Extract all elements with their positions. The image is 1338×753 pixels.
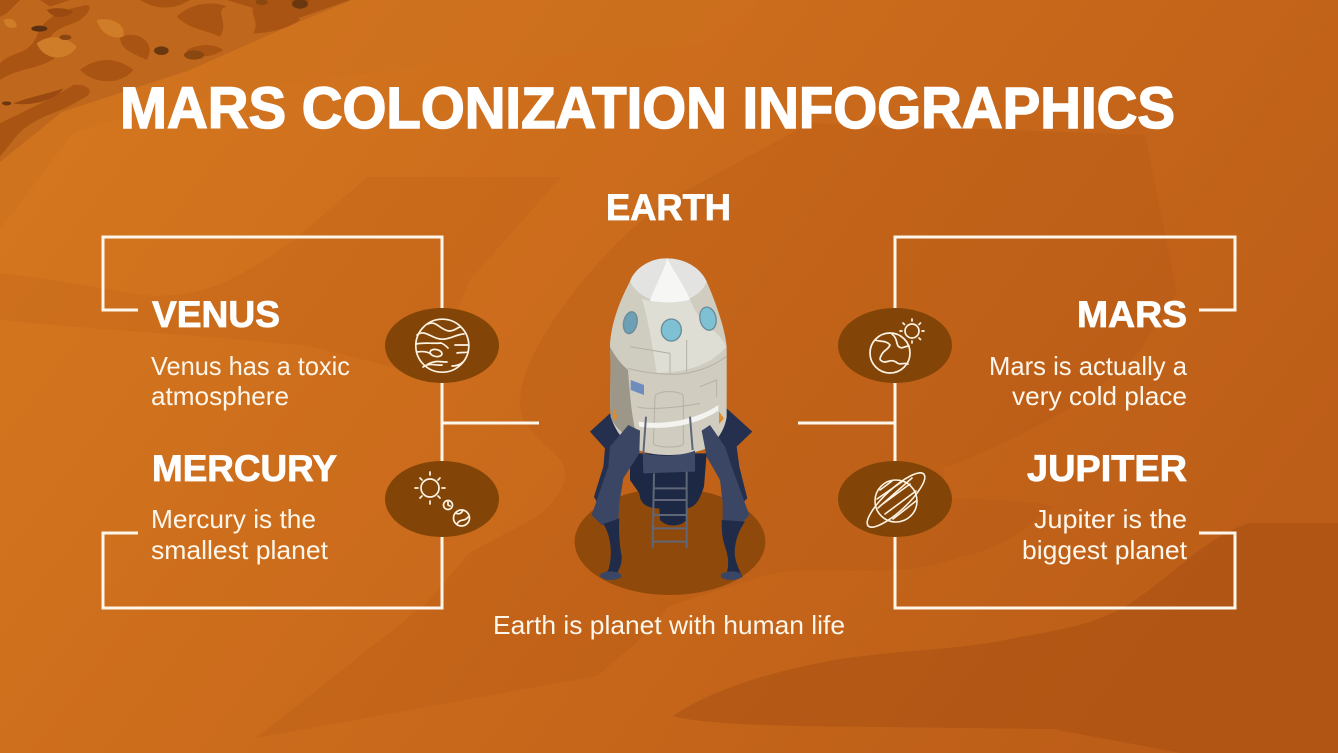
rocket ladder and platform — [643, 417, 695, 548]
rocket ground shadow — [575, 488, 765, 595]
text: mars description: very cold place — [1012, 381, 1187, 411]
text: mars description — [989, 351, 1188, 411]
connector frame: right — [798, 237, 1235, 608]
title: MARS COLONIZATION INFOGRAPHICS — [120, 76, 1175, 141]
rocket rear legs — [590, 408, 752, 505]
text: jupiter description: biggest planet — [1022, 535, 1188, 565]
icon: venus planet — [385, 308, 499, 383]
connector frame: left — [103, 237, 539, 608]
illustration: rocket lander — [575, 258, 765, 595]
rocket hull — [610, 258, 727, 455]
text: mercury description: smallest planet — [151, 535, 329, 565]
heading: earth: EARTH — [606, 187, 731, 228]
text: mars description: Mars is actually a — [989, 351, 1188, 381]
icon: sun and small planets — [385, 461, 499, 537]
text: venus description: Venus has a toxic — [151, 351, 350, 381]
text: jupiter description — [1022, 504, 1188, 565]
heading: mars: MARS — [1077, 294, 1187, 335]
icon: earth and sun — [838, 308, 952, 383]
heading: jupiter: JUPITER — [1027, 448, 1187, 489]
text: venus description: atmosphere — [151, 381, 289, 411]
background: cratered terrain corner — [0, 0, 360, 170]
heading: venus: VENUS — [152, 294, 280, 335]
rocket front legs — [592, 425, 749, 580]
text: mercury description: Mercury is the — [151, 504, 316, 534]
heading: mercury: MERCURY — [152, 448, 337, 489]
text: jupiter description: Jupiter is the — [1034, 504, 1187, 534]
text: venus description — [151, 351, 350, 411]
text: earth description: Earth is planet with human life — [493, 610, 845, 640]
rocket engine — [630, 453, 707, 525]
icon: ringed planet — [838, 461, 952, 537]
text: mercury description — [151, 504, 329, 565]
rocket windows — [622, 306, 718, 341]
